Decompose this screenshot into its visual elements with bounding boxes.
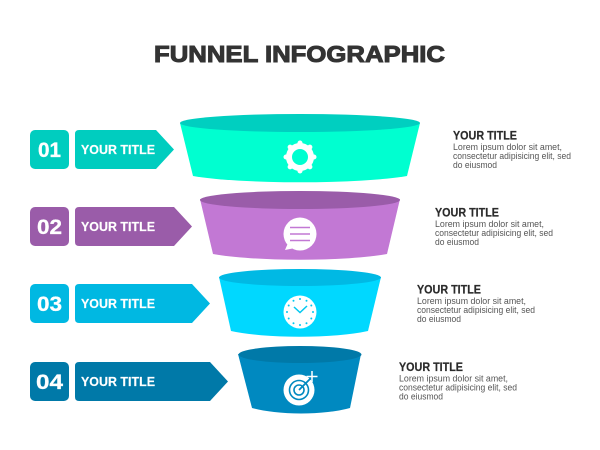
- funnel tier 1: [180, 114, 420, 182]
- text block 1: YOUR TITLE: [453, 130, 517, 142]
- badge 04: 04: [36, 371, 63, 394]
- text block 3: consectetur adipisicing elit, sed: [417, 305, 535, 315]
- step 3 label: [30, 284, 210, 323]
- icon: chat bubble: [284, 218, 316, 250]
- badge 03: 03: [37, 293, 62, 316]
- text block 1: do eiusmod: [453, 160, 497, 170]
- text block 1: [453, 130, 571, 170]
- title: FUNNEL INFOGRAPHIC: [154, 41, 445, 67]
- icon: clock: [284, 296, 316, 328]
- step 1 label: [30, 130, 174, 169]
- text block 2: Lorem ipsum dolor sit amet,: [435, 219, 544, 229]
- icon: gear: [286, 143, 314, 171]
- text block 2: YOUR TITLE: [435, 208, 499, 220]
- text block 4: do eiusmod: [399, 392, 443, 402]
- badge 01: 01: [38, 139, 61, 162]
- badge 04: [30, 362, 69, 401]
- text block 4: [399, 362, 517, 402]
- badge 02: 02: [37, 216, 62, 239]
- text block 4: Lorem ipsum dolor sit amet,: [399, 374, 508, 384]
- icon: target: [284, 371, 318, 406]
- text block 3: YOUR TITLE: [417, 284, 481, 296]
- funnel tier 4: [238, 346, 362, 413]
- arrow tag 4: [75, 362, 228, 401]
- arrow tag 3: [75, 284, 210, 323]
- badge 01: [30, 130, 69, 169]
- text block 3: Lorem ipsum dolor sit amet,: [417, 296, 526, 306]
- arrow tag 3: YOUR TITLE: [81, 297, 155, 311]
- text block 2: do eiusmod: [435, 237, 479, 247]
- text block 3: [417, 284, 535, 324]
- funnel tier 2: [200, 191, 400, 260]
- arrow tag 1: YOUR TITLE: [81, 143, 155, 157]
- arrow tag 2: [75, 207, 192, 246]
- text block 4: YOUR TITLE: [399, 362, 463, 374]
- arrow tag 1: [75, 130, 174, 169]
- badge 03: [30, 284, 69, 323]
- text block 2: consectetur adipisicing elit, sed: [435, 228, 553, 238]
- text block 1: Lorem ipsum dolor sit amet,: [453, 142, 562, 152]
- badge 02: [30, 207, 69, 246]
- step 4 label: [30, 362, 228, 401]
- text block 4: consectetur adipisicing elit, sed: [399, 382, 517, 392]
- arrow tag 2: YOUR TITLE: [81, 220, 155, 234]
- text block 3: do eiusmod: [417, 314, 461, 324]
- funnel tier 3: [219, 269, 381, 337]
- text block 2: [435, 208, 553, 247]
- text block 1: consectetur adipisicing elit, sed: [453, 151, 571, 161]
- arrow tag 4: YOUR TITLE: [81, 375, 155, 389]
- step 2 label: [30, 207, 192, 246]
